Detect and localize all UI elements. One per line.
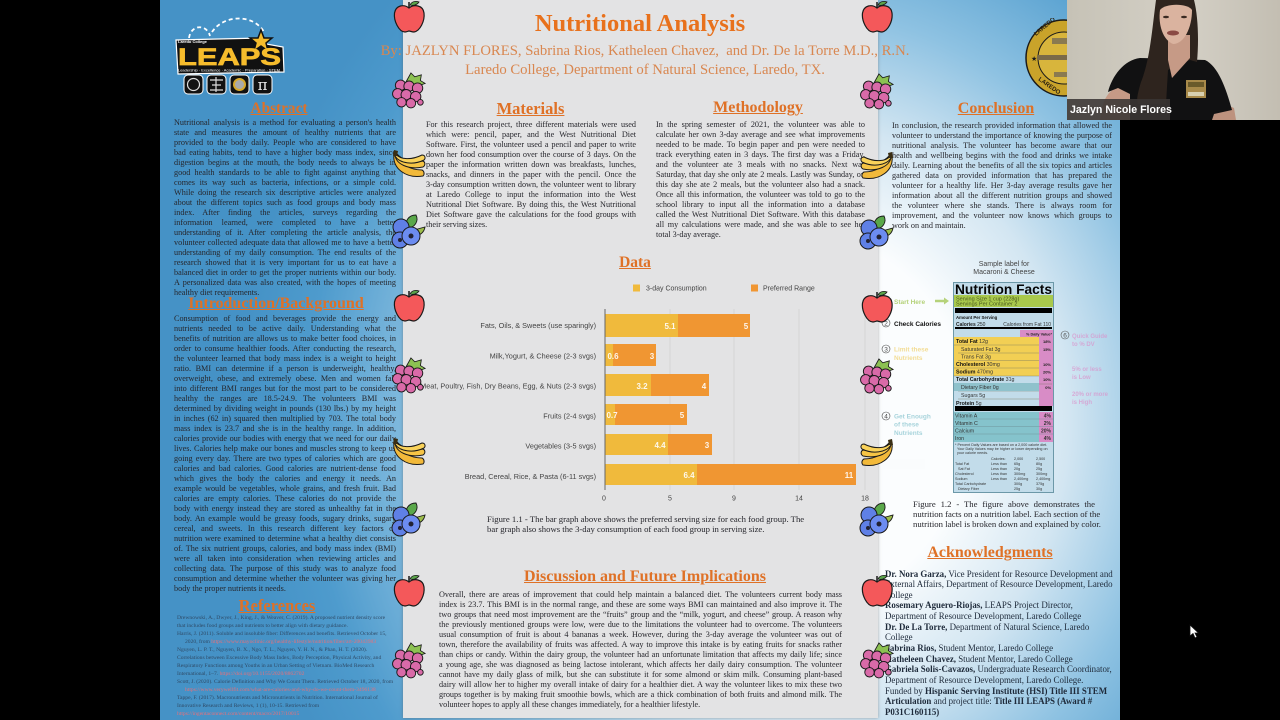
nutrition label left annotations: Nutrients — [894, 430, 923, 437]
legend — [633, 284, 815, 292]
text: conclusion: daily. Learning about the benefits of all the six topics and articles — [892, 161, 1112, 170]
text: references — [177, 615, 393, 717]
text: references: Respiratory Functions among Youths in an Urban Setting of Vietnam. BioMed Research — [177, 663, 374, 669]
text: methodology: total 3-day average. — [656, 230, 721, 239]
text: introduction: going every day. There are two types of calories which are good — [174, 454, 396, 463]
nutrition label left annotations: Get Enough — [894, 414, 931, 420]
text: discussion: Overall, there are areas of improvement that could help maintain a balanced diet. The volunteers current body mass — [439, 590, 842, 599]
heading: conclusion: Conclusion — [958, 100, 1034, 117]
white smudge on label annotations — [881, 459, 925, 469]
logo: LEAPS: π — [258, 76, 268, 94]
icon: apple, left 3 — [394, 575, 425, 607]
icon: banana, right 2 — [860, 439, 893, 466]
text: introduction: calories and bad calories. Good calories are nutrient-dense food — [174, 464, 396, 473]
text: references: Drewnowski, A., Dwyer, J., King, J., & Weaver, C. (2019). A proposed nutrient density score — [177, 615, 385, 621]
nutrition facts label: Your Daily Values may be higher or lower depending on — [957, 447, 1048, 451]
legend: 3-day Consumption — [646, 286, 707, 292]
text: methodology: all my calculations were made, and she was able to see her — [656, 220, 865, 229]
nutrition label right annotations: is Low — [1072, 375, 1091, 381]
nutrition facts label: Total Carbohydrate — [955, 482, 986, 486]
nutrition label left annotations: Limit these — [894, 346, 929, 354]
text: conclusion: information about all the different nutrition groups and showed — [892, 191, 1112, 200]
bar value labels: 4 — [702, 382, 707, 391]
nutrition facts label: Sodium 470mg — [956, 370, 993, 376]
panel: center column background — [403, 0, 878, 718]
nutrition facts label: your calorie needs. — [957, 451, 988, 455]
text: introduction: into different BMI ranges but for the most part to be considered — [174, 384, 396, 393]
nutrition facts label: Vitamin A — [955, 414, 978, 420]
text: materials: For this research project, three different materials were used — [426, 120, 636, 129]
text: introduction — [174, 314, 396, 593]
text: references: Tappe, F. (2017). Macronutrients and Micronutrients in Nutrition. International Journal of — [177, 695, 378, 701]
nutrition facts label: Sodium — [955, 477, 968, 481]
bar value labels: 0.6 — [607, 352, 619, 361]
text: abstract: healthy diet requirements. — [174, 288, 259, 297]
nutrition facts label: 15% — [1043, 347, 1051, 352]
category labels: Milk,Yogurt, & Cheese (2-3 svgs) — [490, 352, 596, 360]
nutrition facts label: Sat Fat — [958, 467, 970, 471]
heading: methodology: Methodology — [713, 99, 803, 116]
text: conclusion: work on and maintain. — [892, 221, 966, 230]
axis tick labels: 5 — [668, 496, 672, 502]
nutrition label left annotations: 3 — [884, 346, 888, 354]
icon: blueberry, left 1 — [392, 214, 426, 248]
category labels: Fruits (2-4 svgs) — [543, 412, 596, 420]
nutrition facts label: 0% — [1045, 385, 1051, 390]
bars — [605, 314, 856, 485]
icon: blueberry, right 1 — [860, 216, 894, 250]
text: abstract: Nutritional analysis is a method for evaluating a person's health — [174, 118, 396, 127]
bar value labels: 5 — [680, 411, 685, 420]
poster background — [160, 0, 1120, 720]
text: introduction: overweight, obese, and extremely obese. Men and women fall — [174, 374, 396, 383]
category labels: Fats, Oils, & Sweets (use sparingly) — [480, 321, 596, 330]
text: materials: snacks, and dinners in the paper with the pencil. Once the — [426, 170, 636, 179]
logo: LEAPS: Laredo College — [178, 39, 208, 44]
nutrition label right annotations: is High — [1072, 400, 1092, 406]
nutrition facts label: 20% — [1041, 428, 1052, 434]
text: abstract: research showed that it is very important for us to eat have a — [174, 258, 396, 267]
bar value labels — [606, 322, 854, 480]
nutrition label left annotations: Start Here — [894, 299, 925, 306]
nutrition label right annotations — [1060, 330, 1109, 406]
text: acknowledgments: Dr. Nora Garza, Vice President for Resource Development and — [885, 568, 1113, 578]
nutrition facts label: 2,500 — [1036, 457, 1045, 461]
text: introduction: lives. Calories help make our bones and muscles strong to keep us — [174, 444, 396, 453]
text: abstract: balanced diet in order to get the proper nutrients within our body. — [174, 268, 396, 277]
nutrition label caption — [973, 260, 1035, 276]
nutrition facts label: 65g — [1014, 462, 1020, 466]
nutrition label left annotations: Nutrients — [894, 355, 923, 362]
affiliation line: Laredo College, Department of Natural Science, Laredo, TX. — [465, 62, 825, 78]
text: introduction: ratio. BMI can determine if a person is underweight, healthy, — [174, 364, 396, 373]
nutrition facts label: Calcium — [955, 428, 975, 434]
bar value labels: 3.2 — [636, 382, 648, 391]
axis tick labels: 9 — [732, 496, 736, 502]
text: methodology: In the spring semester of 2021, the volunteer was able to — [656, 120, 865, 129]
college seal — [1025, 18, 1067, 97]
text: acknowledgments: Rosemary Aguero-Riojas, LEAPS Project Director, — [885, 600, 1073, 610]
category labels: Bread, Cereal, Rice, & Pasta (6-11 svgs) — [465, 472, 596, 481]
nutrition facts label: Calories: — [991, 457, 1006, 461]
text: abstract: While doing the research six descriptive articles were analyzed — [174, 188, 396, 197]
icon: banana, left 1 — [393, 150, 426, 177]
text: introduction: example would be vegetables, whole grains, and fresh fruit. Bad — [174, 484, 396, 493]
text: introduction: body the proper nutrients it needs. — [174, 584, 286, 593]
text: conclusion: health and wellbeing begins with the food and drinks we intake — [892, 151, 1112, 160]
legend: Preferred Range — [763, 286, 815, 292]
text: discussion: a young age, she was diagnosed as being lactose intolerant, which affects her daily dairy consumption. The volunteer — [439, 660, 842, 669]
icon: mouse cursor — [1190, 624, 1199, 638]
text: discussion: two groups that need most improvement are the “fruits” group and the “milk, yogurt, and cheese” group. A reason why — [439, 610, 842, 619]
text: methodology: Once all this information, the volunteer was told to go to the — [656, 190, 865, 199]
text: acknowledgments: Katheleen Chavez, Student Mentor, Laredo College — [885, 654, 1073, 664]
nutrition facts label: Dietary Fiber — [958, 487, 980, 491]
nutrition facts label — [953, 282, 1054, 493]
heading: materials: Materials — [497, 99, 564, 118]
caption: figure 1.1 — [487, 514, 804, 534]
text: introduction: healthy the ranges are 18.5-24.9. The volunteers BMI was — [174, 394, 396, 403]
text: conclusion: gathered data on provided information that has prepared the — [892, 171, 1112, 180]
text: introduction: consumption and determine whether the volunteer was giving her — [174, 574, 396, 583]
nutrition facts label: Less than — [991, 477, 1007, 481]
nutrition facts label: Less than — [991, 472, 1007, 476]
text: materials: Nutritional Diet Software. By doing this, the West Nutritional — [426, 200, 636, 209]
text: acknowledgments: Department of Resource Development, Laredo College — [885, 611, 1081, 621]
bar value labels: 6.4 — [683, 471, 695, 480]
nutrition label right annotations: to % DV — [1072, 342, 1095, 348]
name tag: Jazlyn Nicole Flores — [1070, 104, 1172, 116]
nutrition facts label: 375g — [1036, 482, 1044, 486]
nutrition facts label: 18% — [1043, 339, 1051, 344]
nutrition facts label: 2,400mg — [1036, 477, 1050, 481]
text: discussion: cannot have my daily glass of milk, but she can substitute it for some almond or skim milk. Consuming plant-based — [439, 670, 842, 679]
nutrition facts label: 20g — [1014, 467, 1020, 471]
nutrition facts label: % Daily Value* — [1026, 332, 1053, 336]
nutrition facts label: 4% — [1044, 436, 1052, 442]
nutrition facts label: Cholesterol 30mg — [956, 362, 1000, 368]
text: abstract: A personalized data was also created, with the hopes of meeting — [174, 278, 396, 287]
logo: LEAPS — [175, 18, 285, 94]
caption: figure 1.2: nutrition facts on a nutrition label. Each section of the — [913, 509, 1100, 519]
text: conclusion: improvement, and the volunteer now knows which groups to — [892, 211, 1112, 220]
nutrition facts label: 4% — [1044, 414, 1052, 420]
text: references: 2020, from https://www.mayoclinic.org/healthy-lifestyle/nutrition/fiber/art-20043983 — [185, 639, 376, 645]
text: discussion: town, therefore the availability of fruits was affected. A way to improve this intake is by eating fruits for snacks rather — [439, 640, 842, 649]
text: abstract: comes its way such as bacteria, infections, or a simple cold. — [174, 178, 396, 187]
text: acknowledgments: College — [885, 590, 913, 600]
text: references: https://www.verywellfit.com/what-are-calories-and-why-do-we-count-them-3496138 — [185, 687, 376, 693]
text: conclusion: volunteer for a healthy life. Her 3-day average results gave her — [892, 181, 1112, 190]
text: methodology: this day she ate 2 meals, but the volunteer also had a snack. — [656, 180, 865, 189]
icon: grapes, right 1 — [860, 73, 894, 110]
icon: grapes, left 3 — [392, 642, 426, 678]
bar value labels: 11 — [845, 471, 854, 480]
text: materials: paper the information written down was breakfasts, lunches, — [426, 160, 636, 169]
text: discussion: than chips or candy. Within the dairy group, the volunteer had an unfortunate limitation that affects my daily life; since — [439, 650, 842, 659]
nutrition facts label: 2,000 — [1014, 457, 1023, 461]
text: materials: 3-day consumption written down, the volunteer went to library — [426, 180, 636, 189]
icon: grapes, left 2 — [392, 357, 426, 394]
nutrition facts label: 2% — [1044, 421, 1052, 427]
nutrition label left annotations: 2 — [884, 320, 888, 328]
nutrition facts label: 25g — [1014, 487, 1020, 491]
nutrition label caption: Macaroni & Cheese — [973, 269, 1035, 276]
nutrition facts label: 80g — [1036, 462, 1042, 466]
text: introduction: collecting data. The purpose of this study was to analyze food — [174, 564, 396, 573]
college seal: LAREDO — [1037, 77, 1061, 96]
icon: apple, right 1 — [862, 1, 893, 33]
bar value labels: 0.7 — [606, 411, 618, 420]
axis tick labels: 18 — [861, 496, 869, 502]
text: methodology — [656, 120, 865, 239]
text: introduction: calories provide our bodies with energy that we need for our daily — [174, 434, 396, 443]
bar value labels: 4.4 — [654, 441, 666, 450]
text: methodology: track everything eaten in 3 days. The first day was a Friday, — [656, 150, 865, 159]
nutrition facts label: Serving Size 1 cup (228g) — [956, 296, 1019, 302]
text: materials: their serving sizes. — [426, 220, 487, 229]
text: references: Innovative Research and Reviews, 1 (1), 10-15. Retrieved from — [177, 703, 319, 709]
bar value labels: 3 — [650, 352, 655, 361]
axis tick labels: 14 — [795, 496, 803, 502]
text: conclusion — [892, 121, 1112, 230]
caption: figure 1.2 — [913, 499, 1101, 529]
icon: grapes, right 2 — [860, 358, 894, 394]
nutrition label caption: Sample label for — [979, 261, 1029, 268]
nutrition facts label: 10% — [1043, 377, 1051, 382]
bar chart: food group servings — [420, 284, 869, 502]
text: conclusion: nutritional analysis. The volunteer has become aware that our — [892, 141, 1112, 150]
nutrition facts label: Total Carbohydrate 31g — [956, 377, 1015, 383]
text: discussion: dairy will allow her to higher my overall intake of dairy for a healthier diet. A way the volunteer likes to mix these two — [439, 680, 842, 689]
text: discussion: index is 23.7. This BMI is in the normal range, and these are some ways BMI can maintained and also improve it. The — [439, 600, 842, 609]
text: introduction: were all taken into consideration when reviewing articles and — [174, 554, 396, 563]
text: introduction: body. An example would be greasy foods, sugary drinks, sugary — [174, 514, 396, 523]
text: conclusion: volunteer to understand the importance of knowing the purpose of — [892, 131, 1112, 140]
text: introduction: calories are empty calories. These calories do not provide the — [174, 494, 396, 503]
text: acknowledgments: P031C160115) — [885, 707, 939, 717]
heading: acknowledgments: Acknowledgments — [927, 544, 1053, 561]
nutrition label right annotations: 20% or more — [1072, 392, 1109, 398]
text: abstract — [174, 118, 396, 297]
axis tick labels: 0 — [602, 496, 606, 502]
text: references: Nguyen, L. P. T., Nguyen, B. X., Ngo, T. L., Nguyen, Y. H. N., & Phan, H. T. (2020). — [177, 647, 367, 653]
icon: blueberry, left 2 — [392, 502, 426, 536]
heading: data: Data — [619, 254, 651, 271]
text: abstract: understanding of my daily consumption. The end results of the — [174, 248, 396, 257]
text: materials: at Laredo College to input the information into the West — [426, 190, 636, 199]
text: abstract: bad eating habits, tend to have a higher body mass index, since — [174, 148, 396, 157]
text: methodology: called the West Nutritional Diet Software. With this database — [656, 210, 865, 219]
text: acknowledgments: Funded by Hispanic Serving Institute (HSI) Title III STEM — [885, 686, 1107, 696]
nutrition facts label: 10% — [1043, 362, 1051, 367]
text: acknowledgments: Gabriela Solis-Cavazos, Undergraduate Research Coordinator, — [885, 664, 1112, 674]
category labels: Vegetables (3-5 svgs) — [525, 442, 596, 450]
nutrition facts label: 300mg — [1036, 472, 1047, 476]
text: references: that includes food groups and nutrients to better align with dietary guidance. — [177, 623, 348, 629]
text: introduction: determined by dividing weight in pounds (130 lbs.) by my height — [174, 404, 396, 413]
text: methodology: needed to be made. To begin paper and pen were needed to — [656, 140, 865, 149]
nutrition label right annotations: Quick Guide — [1072, 334, 1108, 340]
nutrition facts label: * Percent Daily Values are based on a 2,000 calorie diet. — [955, 443, 1047, 447]
text: conclusion: the volunteer where she stands. There is always room for — [892, 201, 1112, 210]
nutrition facts label: Trans Fat 3g — [961, 354, 991, 360]
heading: discussion: Discussion and Future Implications — [524, 568, 766, 585]
text: introduction: nutrition were examined to determine what a healthy diet consists — [174, 534, 396, 543]
category labels — [420, 321, 596, 481]
icon: banana, left 2 — [393, 438, 426, 465]
icon: apple, left 2 — [394, 290, 425, 322]
nutrition facts label: Calories 250 — [956, 322, 986, 328]
nutrition facts label: Saturated Fat 3g — [961, 347, 1001, 353]
text: abstract: good health standards to be able to fight against anything that — [174, 168, 396, 177]
nutrition facts label: Total Fat — [955, 462, 969, 466]
bar value labels: 5 — [744, 322, 749, 331]
category labels: Meat, Poultry, Fish, Dry Beans, Egg, & Nuts (2-3 svgs) — [420, 382, 596, 390]
text: materials: Diet Software gave the calculations for the food groups with — [426, 210, 636, 219]
nutrition facts label: 300mg — [1014, 472, 1025, 476]
heading: introduction: Introduction/Background — [188, 295, 364, 312]
text: abstract: understanding of it. After completing the article analysis, the — [174, 228, 396, 237]
nutrition facts label: Total Fat 12g — [956, 339, 988, 345]
text: acknowledgments — [885, 568, 1113, 717]
text: methodology: and the volunteer ate 3 meals with no snacks. Next was — [656, 160, 865, 169]
nutrition facts label: 30g — [1036, 487, 1042, 491]
icon: grapes, left 1 — [392, 72, 426, 108]
heading: references: References — [239, 596, 315, 615]
name tag — [1067, 99, 1172, 120]
webcam: presenter video — [1067, 0, 1280, 120]
nutrition facts label: 25g — [1036, 467, 1042, 471]
text: acknowledgments: Dr. De La Torre, Department of Natural Science, Laredo — [885, 622, 1089, 632]
nutrition label left annotations: of these — [894, 422, 919, 428]
text: references: International, 1–7. https://doi.org/10.1155/2020/8862702 — [177, 671, 304, 677]
text: introduction: in inches (62 in) squared then multiplied by 703. The total body — [174, 414, 396, 423]
text: introduction: mass index is 23.7 and she is in the healthy range. In addition, — [174, 424, 396, 433]
text: materials: Software. First, the volunteer used a pencil and paper to write — [426, 140, 636, 149]
nutrition facts label: Cholesterol — [955, 472, 974, 476]
caption: figure 1.1: Figure 1.1 - The bar graph above shows the preferred serving size for each food group. The — [487, 514, 804, 524]
title: Nutritional Analysis — [535, 10, 745, 37]
text: acknowledgments: Department of Resource Development, Laredo College. — [885, 675, 1083, 685]
nutrition facts label: Sugars 5g — [961, 393, 985, 399]
icon: apple, left 1 — [394, 1, 425, 33]
text: introduction: which gives the body the calories and energy it needs. An — [174, 474, 396, 483]
nutrition facts label: Nutrition Facts — [955, 282, 1052, 297]
text: acknowledgments: External Affairs, Department of Resource Development, Laredo — [885, 579, 1113, 589]
nutrition facts label: 20% — [1043, 370, 1051, 374]
text: abstract: provided to the body daily. People who are considered to have — [174, 138, 396, 147]
nutrition facts label: Vitamin C — [955, 421, 978, 427]
text: abstract: state and measures the amount of healthy nutrients that are — [174, 128, 396, 137]
nutrition facts label: Servings Per Container 2 — [956, 302, 1017, 308]
bar value labels: 5.1 — [664, 322, 676, 331]
logo: LEAPS: LEAPS — [178, 44, 281, 71]
text: conclusion: In conclusion, the research provided information that allowed the — [892, 121, 1112, 130]
text: materials: down her food consumption over the course of 3 days. On the — [426, 150, 636, 159]
axis tick labels — [602, 496, 869, 502]
text: methodology: Saturday, that day she only ate 2 meals. Lastly was Sunday, on — [656, 170, 865, 179]
nutrition label right annotations: 5% or less — [1072, 367, 1102, 373]
text: abstract: digestion begins at the mouth, the body needs to always be in — [174, 158, 396, 167]
icon: apple, right 3 — [862, 575, 893, 607]
text: methodology: calculate her own 3-day average and see what improvements — [656, 130, 865, 139]
text: acknowledgments: Articulation and project title: Title III LEAPS (Award # — [885, 696, 1092, 706]
nutrition facts label: Less than — [991, 462, 1007, 466]
text: references: Scott, J. (2020). Calorie Definition and Why We Count Them. Retrieved October 18, 2020, from — [177, 679, 393, 685]
nutrition label right annotations: 6 — [1063, 332, 1067, 340]
caption: figure 1.2: nutrition label is broken down and explained by color. — [913, 519, 1101, 529]
caption: figure 1.2: Figure 1.2 - The figure above demonstrates the — [913, 499, 1095, 509]
college seal: ★ — [1031, 55, 1037, 63]
text: introduction: of. The six nutrient groups, calories, and body mass index (BMI) — [174, 544, 396, 553]
nutrition label left annotations — [882, 298, 949, 437]
text: references: https://ingentaconnect.com/content/macro/2017/10015 — [177, 711, 299, 717]
nutrition facts label: Less than — [991, 467, 1007, 471]
bar value labels: 3 — [705, 441, 710, 450]
nutrition label left annotations: Check Calories — [894, 321, 941, 328]
nutrition facts label: 2,400mg — [1014, 477, 1028, 481]
authors line: By: JAZLYN FLORES, Sabrina Rios, Katheleen Chavez, and Dr. De la Torre M.D., R.N. — [381, 43, 909, 59]
nutrition facts label: Dietary Fiber 0g — [961, 385, 999, 391]
text: introduction: benefits of nutrition are allows us to make better food choices, in — [174, 334, 396, 343]
text: introduction: the volunteer learned that body mass index is a weight to height — [174, 354, 396, 363]
icon: apple, right 2 — [862, 291, 893, 323]
text: methodology: school library to input all the information into a database — [656, 200, 865, 209]
text: introduction: order to consume healthier foods. After conducting the research, — [174, 344, 396, 353]
text: abstract: volunteer collected adequate data that allowed me to have a better — [174, 238, 396, 247]
text: abstract: information learned, were completed to have a better — [174, 218, 396, 227]
text: discussion — [439, 590, 842, 709]
logo: LEAPS: Leadership · Excellence · Academic · Preparation · STEM — [178, 68, 280, 72]
text: introduction: body with energy instead they are stored as unhealthy fat in the — [174, 504, 396, 513]
nutrition label left annotations: 4 — [884, 414, 888, 420]
heading: abstract: Abstract — [251, 100, 307, 117]
text: abstract: about the different topics such as food groups and body mass — [174, 198, 396, 207]
text: materials — [426, 120, 636, 229]
icon: blueberry, right 2 — [860, 502, 894, 536]
text: discussion: usual consumption of fruit is about 4 bananas a week. However, during the 3-day average the volunteer was out of — [439, 630, 842, 639]
text: discussion: groups together is by making fruit smoothie bowls, which are a thick combination of both fruits and almond milk. The — [439, 690, 842, 699]
text: discussion: the previously mentioned groups were low, were due to the limitations the volunteer had to overcome. The volunteers — [439, 620, 842, 629]
text: introduction: nutrients needed to be active daily. Understanding what the — [174, 324, 396, 333]
text: discussion: volunteer hopes to apply all these changes immediately, for a healthier lifestyle. — [439, 700, 700, 709]
caption: figure 1.1: bar graph also shows the 3-day consumption of each food group in serving size. — [487, 524, 764, 534]
nutrition facts label: 300g — [1014, 482, 1022, 486]
icon: banana, right 1 — [860, 152, 893, 179]
text: acknowledgments: Sabrina Rios, Student Mentor, Laredo College — [885, 643, 1053, 653]
nutrition facts label: Calories from Fat 110 — [1003, 322, 1051, 328]
icon: grapes, right 3 — [860, 642, 894, 678]
text: acknowledgments: College — [885, 632, 913, 642]
nutrition facts label: Iron — [955, 436, 964, 442]
text: references: Harris, J. (2011). Soluble and insoluble fiber: Differences and benefits. Retrieved October 15, — [177, 631, 387, 637]
text: references: Correlations between Excessive Body Mass Index, Body Perception, Physical Activity, and — [177, 655, 381, 661]
text: abstract: index. After finding the articles, surveys regarding the — [174, 208, 396, 217]
text: introduction: Consumption of food and beverages provide the energy and — [174, 314, 396, 323]
text: introduction: cereal, and sweets. In this research different key factors of — [174, 524, 396, 533]
nutrition facts label: Protein 5g — [956, 401, 982, 407]
nutrition facts label: Amount Per Serving — [956, 315, 998, 320]
text: materials: which were: pencil, paper, and the West Nutritional Diet — [426, 130, 636, 139]
